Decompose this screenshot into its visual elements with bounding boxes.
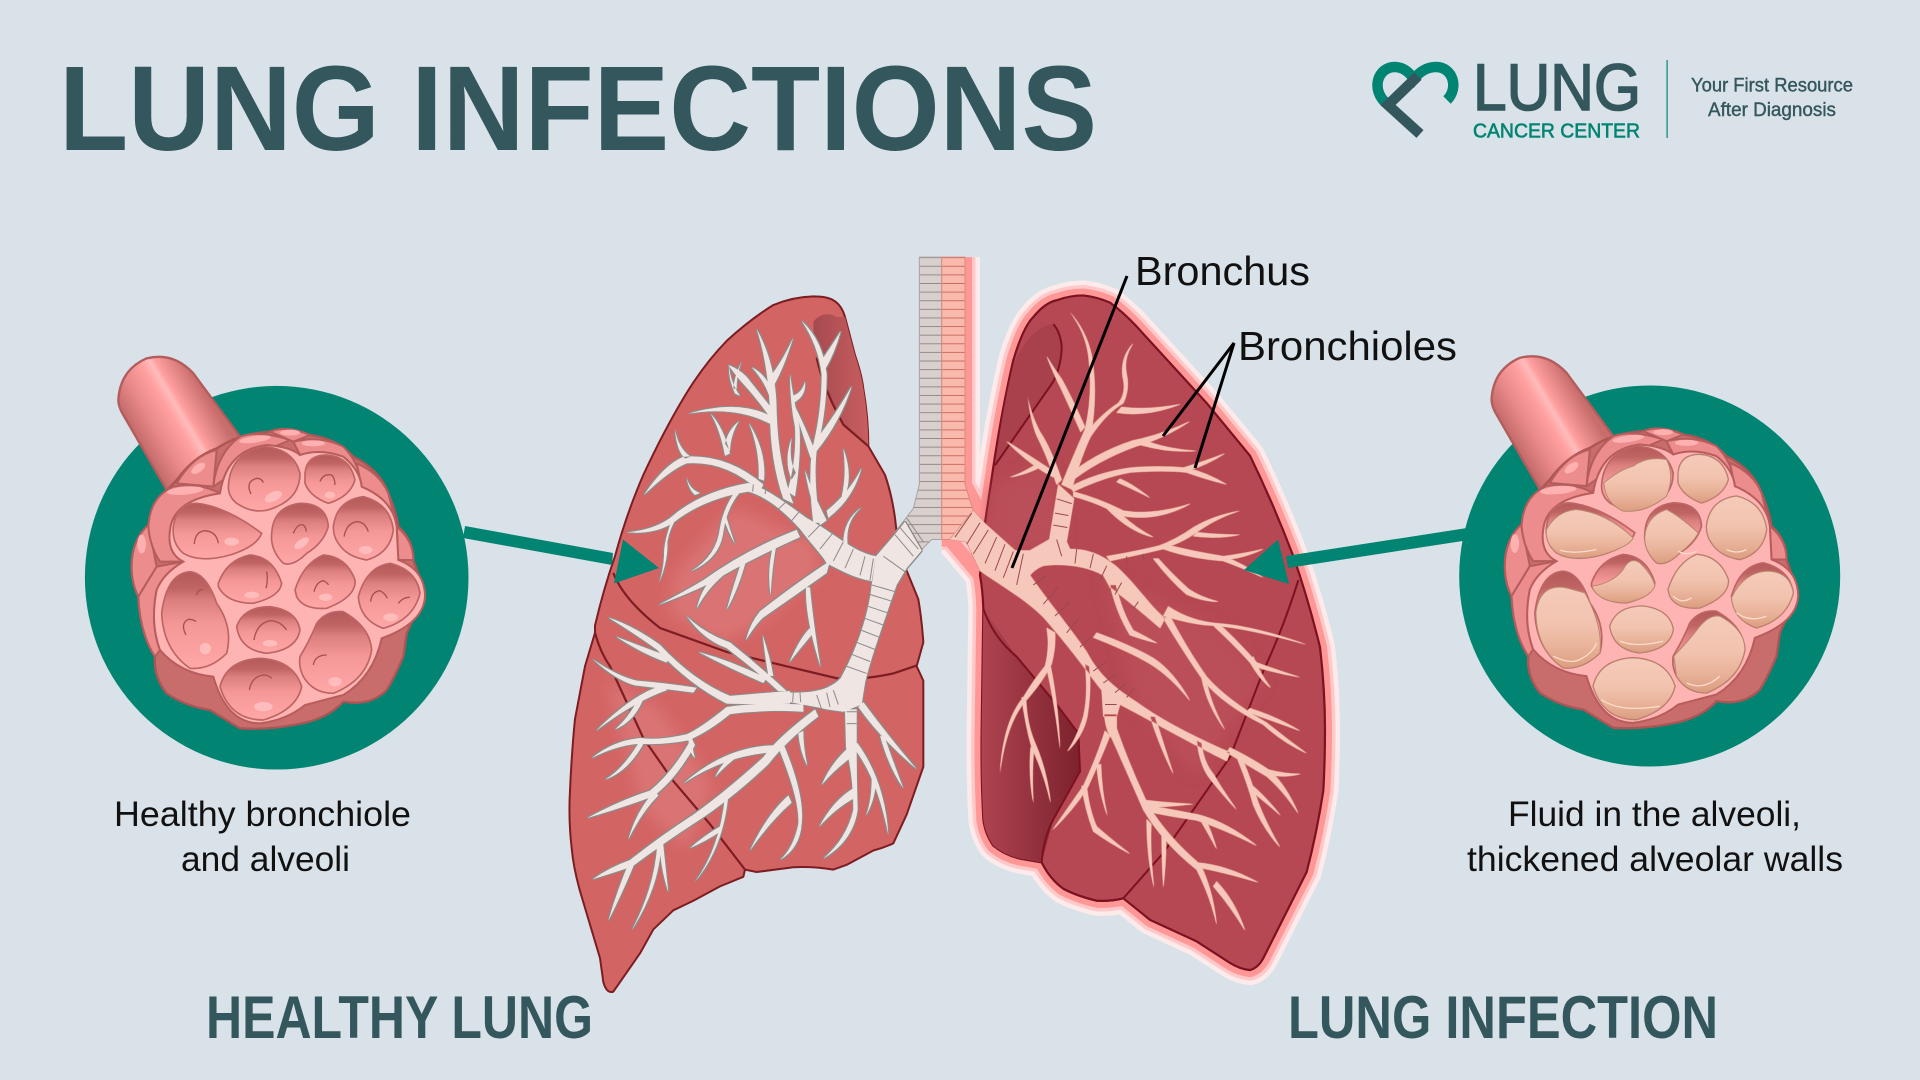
- trachea: infected side: [942, 257, 973, 539]
- title: LUNG INFECTIONS: [59, 40, 1097, 176]
- panel: infected alveoli: [1459, 356, 1840, 766]
- callout: bronchus pointer: [1012, 276, 1127, 568]
- callout: bronchioles pointers: [1163, 343, 1234, 468]
- label: bronchioles: Bronchioles: [1238, 323, 1457, 369]
- label: bronchus: Bronchus: [1135, 248, 1310, 294]
- infection glow: [942, 257, 1325, 970]
- caption: infected: [1467, 795, 1843, 879]
- icon: healthy alveoli cluster: [118, 357, 425, 729]
- logo wordmark: LUNG: [1473, 50, 1641, 124]
- heading: lung infection: LUNG INFECTION: [1288, 984, 1718, 1051]
- lobe fissures: [983, 324, 1298, 901]
- infected bronchial tree: [950, 312, 1307, 930]
- healthy lung body: [569, 296, 923, 992]
- arrow: right, to infected lung: [1244, 528, 1469, 584]
- caption: healthy: [114, 795, 411, 879]
- trachea: healthy side: [895, 257, 942, 556]
- icon: fluid-filled alveoli cluster: [1492, 356, 1798, 728]
- logo subtitle: CANCER CENTER: [1473, 120, 1640, 142]
- caption: infected: Fluid in the alveoli,: [1508, 795, 1801, 834]
- teal circle: [1459, 386, 1840, 766]
- arrow: left, to healthy lung: [463, 526, 659, 584]
- icon: heart logo: [1377, 67, 1453, 134]
- heading: healthy lung: HEALTHY LUNG: [206, 984, 593, 1051]
- caption: healthy: Healthy bronchiole: [114, 795, 411, 834]
- lobe fissures: [595, 358, 917, 870]
- healthy lung illustration: [569, 257, 942, 992]
- logo: lung cancer center: [1377, 50, 1853, 142]
- panel: healthy alveoli: [85, 357, 468, 770]
- logo tagline: [1691, 76, 1853, 121]
- apex fold: [813, 314, 868, 446]
- infected lung body: [980, 295, 1325, 970]
- teal circle: [85, 386, 468, 770]
- logo tagline: Your First Resource: [1691, 76, 1853, 96]
- logo tagline: After Diagnosis: [1708, 100, 1836, 121]
- healthy bronchial tree: [587, 321, 922, 930]
- caption: healthy: and alveoli: [181, 840, 350, 879]
- caption: infected: thickened alveolar walls: [1467, 840, 1843, 879]
- shaded lower lobe cavity: [982, 609, 1080, 862]
- infected lung illustration: [942, 257, 1325, 970]
